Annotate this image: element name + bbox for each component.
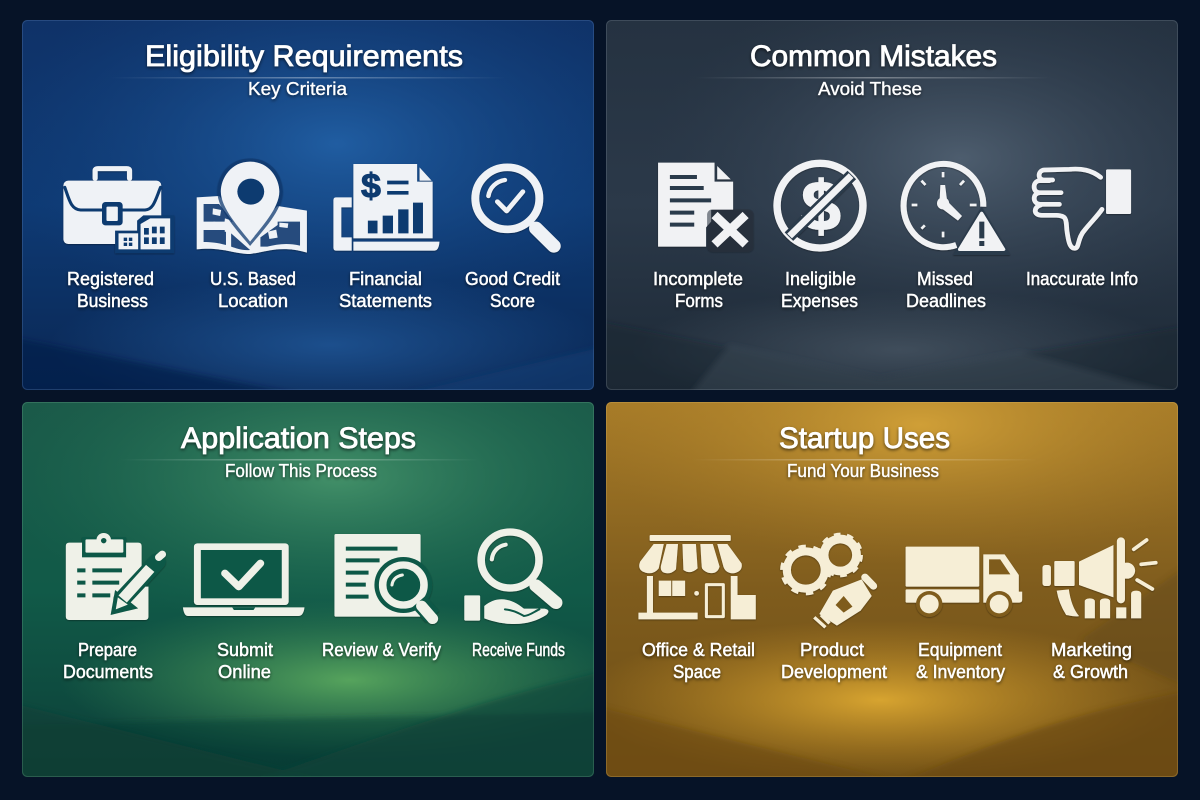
icon: thumbs down bbox=[1034, 169, 1131, 248]
heading: common mistakes: Avoid These bbox=[818, 79, 922, 99]
label: us based location: Location bbox=[218, 290, 288, 311]
label: office and retail space: Space bbox=[673, 661, 721, 682]
heading: startup uses bbox=[690, 422, 1040, 481]
heading: application steps bbox=[120, 422, 480, 481]
icon: incomplete form bbox=[658, 163, 754, 252]
icon: review document with magnifier bbox=[334, 534, 433, 619]
label: receive funds: Receive Funds bbox=[472, 639, 565, 660]
icon: financial statement bbox=[333, 164, 440, 251]
label: ineligible expenses bbox=[781, 268, 858, 311]
label: equipment and inventory: & Inventory bbox=[916, 661, 1006, 682]
label: submit online: Submit bbox=[217, 639, 273, 660]
label: incomplete forms bbox=[653, 268, 743, 311]
label: incomplete forms: Incomplete bbox=[653, 268, 743, 289]
icon: map pin on map bbox=[197, 158, 307, 254]
icon: gears and product bbox=[783, 535, 873, 627]
label: prepare documents: Prepare bbox=[78, 639, 137, 660]
heading: startup uses: Startup Uses bbox=[779, 422, 950, 455]
icon: megaphone and growth bars bbox=[1042, 540, 1156, 618]
label: prepare documents bbox=[63, 639, 153, 682]
label: product development: Product bbox=[800, 639, 864, 660]
heading: application steps: Application Steps bbox=[181, 422, 416, 455]
label: office and retail space bbox=[642, 639, 755, 682]
label: review and verify: Review & Verify bbox=[322, 639, 442, 660]
panel: startup uses bbox=[580, 402, 1195, 782]
panel: application steps bbox=[22, 402, 594, 777]
heading: startup uses: Fund Your Business bbox=[787, 461, 939, 481]
panel: common mistakes bbox=[606, 20, 1178, 390]
label: us based location bbox=[210, 268, 296, 311]
icon: delivery truck bbox=[906, 547, 1022, 617]
heading: eligibility requirements: Key Criteria bbox=[248, 79, 348, 99]
icon: ineligible expenses bbox=[777, 163, 863, 248]
icon: financial statement: $ bbox=[361, 167, 381, 206]
label: registered business bbox=[67, 268, 154, 311]
heading: common mistakes bbox=[695, 40, 1051, 99]
label: ineligible expenses: Ineligible bbox=[785, 268, 856, 289]
icon: ineligible expenses: $ bbox=[801, 166, 841, 245]
heading: eligibility requirements bbox=[110, 40, 506, 99]
icon: hand receiving funds bbox=[464, 532, 556, 624]
label: good credit score bbox=[465, 268, 560, 311]
label: inaccurate info: Inaccurate Info bbox=[1026, 268, 1138, 289]
label: financial statements: Statements bbox=[339, 290, 432, 311]
label: product development: Development bbox=[781, 661, 887, 682]
panel: eligibility requirements bbox=[22, 20, 594, 390]
label: equipment and inventory: Equipment bbox=[918, 639, 1002, 660]
label: us based location: U.S. Based bbox=[210, 268, 296, 289]
label: missed deadlines: Missed bbox=[917, 268, 973, 289]
label: registered business: Business bbox=[77, 290, 148, 311]
label: marketing and growth bbox=[1051, 639, 1132, 682]
label: submit online: Online bbox=[218, 661, 271, 682]
label: office and retail space: Office & Retail bbox=[642, 639, 755, 660]
icon: briefcase with buildings bbox=[63, 169, 174, 253]
label: incomplete forms: Forms bbox=[675, 290, 723, 311]
icon: magnifier with check bbox=[475, 167, 554, 246]
label: prepare documents: Documents bbox=[63, 661, 153, 682]
heading: application steps: Follow This Process bbox=[225, 461, 377, 481]
label: marketing and growth: Marketing bbox=[1051, 639, 1132, 660]
icon: laptop with check bbox=[183, 543, 304, 616]
label: good credit score: Score bbox=[490, 290, 535, 311]
label: product development bbox=[781, 639, 887, 682]
label: missed deadlines bbox=[906, 268, 986, 311]
icon: clipboard with pencil bbox=[66, 533, 162, 620]
label: good credit score: Good Credit bbox=[465, 268, 560, 289]
icon: missed deadlines bbox=[904, 164, 1010, 255]
label: submit online bbox=[217, 639, 273, 682]
label: missed deadlines: Deadlines bbox=[906, 290, 986, 311]
heading: eligibility requirements: Eligibility Requirements bbox=[145, 40, 463, 73]
icon: storefront bbox=[638, 535, 756, 619]
label: marketing and growth: & Growth bbox=[1053, 661, 1128, 682]
label: financial statements: Financial bbox=[349, 268, 422, 289]
label: financial statements bbox=[339, 268, 432, 311]
label: ineligible expenses: Expenses bbox=[781, 290, 858, 311]
label: registered business: Registered bbox=[67, 268, 154, 289]
label: equipment and inventory bbox=[916, 639, 1006, 682]
heading: common mistakes: Common Mistakes bbox=[750, 40, 997, 73]
